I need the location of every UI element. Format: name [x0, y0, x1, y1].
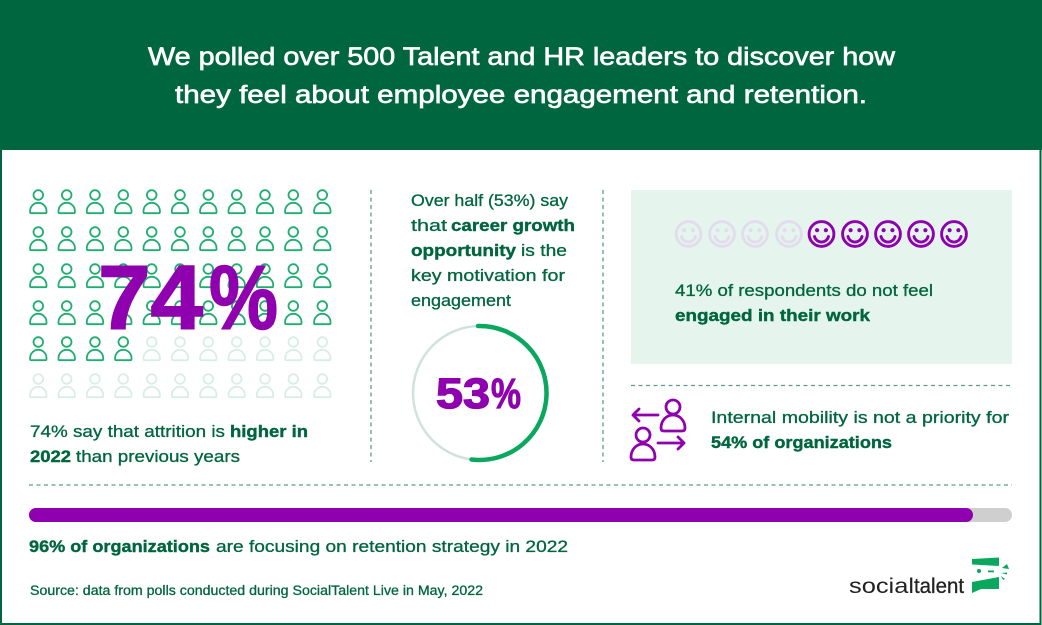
big number 74% [98, 248, 278, 349]
icon grid: people [30, 190, 330, 397]
divider [631, 384, 1012, 386]
title [148, 43, 896, 109]
text: career growth: engagement [411, 291, 511, 310]
text: engagement [675, 281, 933, 325]
panel: 74% attrition [30, 190, 330, 466]
icon: people swapping [631, 400, 685, 460]
panel: internal mobility [631, 400, 1009, 460]
panel: engagement [631, 190, 1012, 364]
big number 74%: 74 [98, 248, 203, 349]
text: engagement: 41% of respondents do not feel [675, 281, 933, 300]
text: career growth: that [411, 216, 447, 235]
text: retention [29, 537, 568, 556]
text: retention: 96% of organizations [29, 537, 210, 556]
text: engagement: engaged in their work [675, 306, 871, 325]
text: attrition: than previous years [76, 447, 240, 466]
text: career growth: Over half (53%) say [411, 191, 569, 210]
text: mobility: 54% of organizations [711, 433, 892, 452]
text: career growth: is the [521, 241, 567, 260]
text: mobility [711, 408, 1009, 452]
divider [370, 190, 372, 462]
title: they feel about employee engagement and retention. [175, 81, 867, 109]
logo: socialtalent: social [849, 575, 914, 598]
text: attrition: 74% say that attrition is [30, 422, 225, 441]
source note: Source: data from polls conducted during SocialTalent Live in May, 2022 [30, 583, 483, 598]
text: retention: are focusing on retention strategy in 2022 [216, 537, 568, 556]
text: career growth: key motivation for [411, 266, 565, 285]
text: attrition: 2022 [30, 447, 71, 466]
icon row: smileys [676, 222, 966, 246]
donut chart: 53%: % [491, 370, 521, 418]
title: We polled over 500 Talent and HR leaders to discover how [148, 43, 896, 71]
big number 74%: % [209, 248, 278, 349]
progress bar: 96% [29, 508, 1012, 522]
text: attrition: higher in [230, 422, 308, 441]
header banner [0, 0, 1042, 150]
text: career growth: opportunity [411, 241, 517, 260]
logo: socialtalent [849, 558, 1009, 598]
panel: career growth [411, 191, 575, 460]
logo: socialtalent: talent [914, 575, 964, 598]
text: career growth: career growth [451, 216, 575, 235]
divider [602, 190, 604, 462]
donut chart: 53% [413, 326, 547, 460]
text: attrition [30, 422, 308, 466]
divider [29, 484, 1012, 486]
donut chart: 53%: 53 [436, 370, 490, 418]
text: career growth [411, 191, 575, 310]
text: mobility: Internal mobility is not a priority for [711, 408, 1009, 427]
